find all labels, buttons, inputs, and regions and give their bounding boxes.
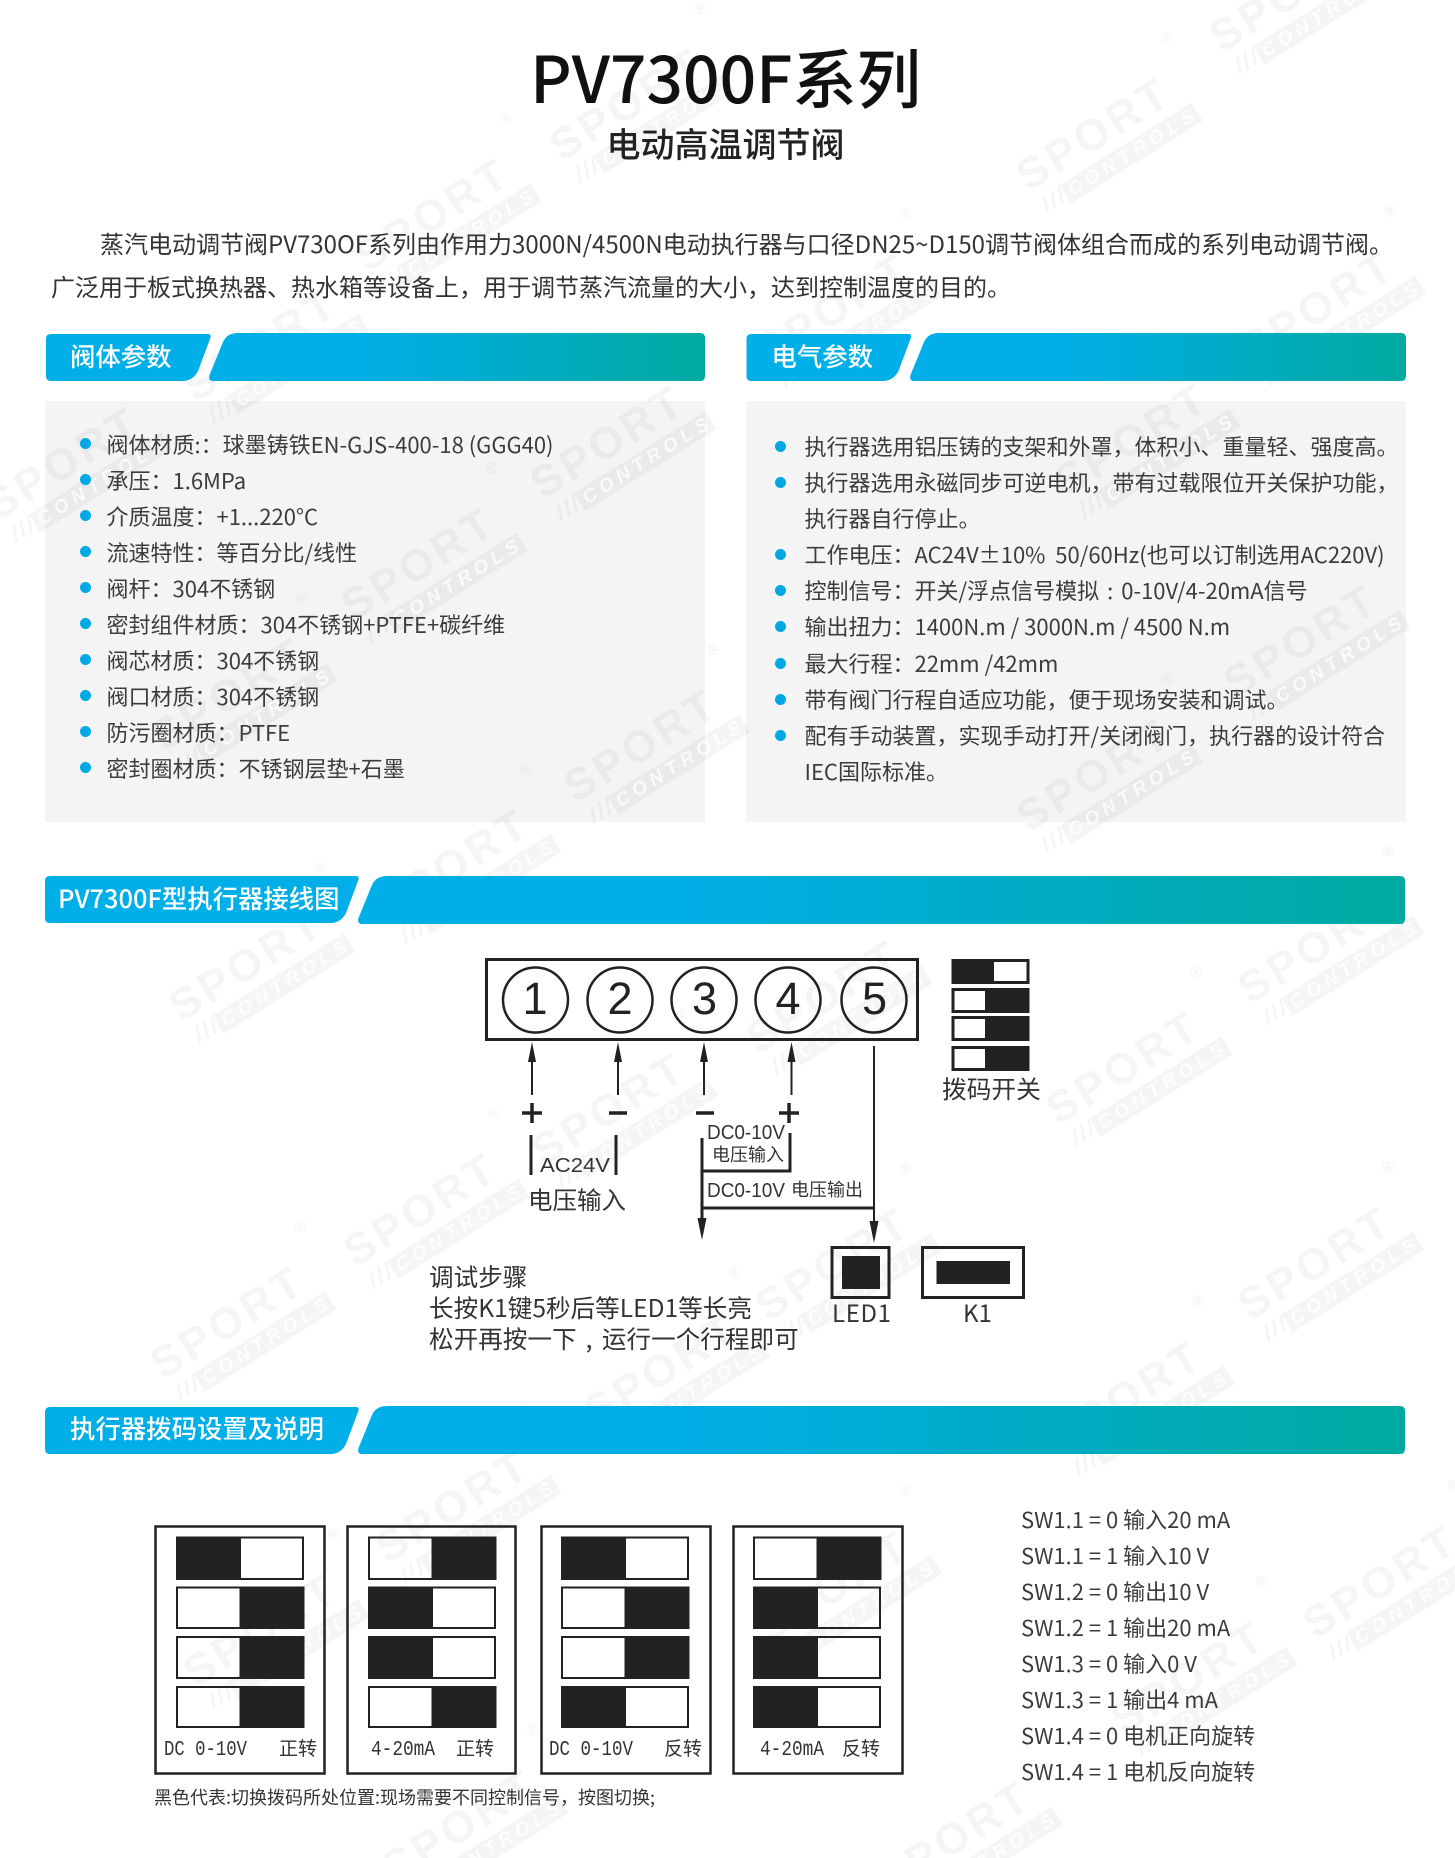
AC24V input bracket [528, 1135, 626, 1217]
list: SW settings: SW1.2 = 0 输出10 V [1021, 1575, 1209, 1607]
watermark layer: ® [1253, 1572, 1272, 1593]
DIP settings: DC 0-10V forward: DC 0-10V [164, 1739, 247, 1762]
list: body parameters: 介质温度：+1...220°C [106, 500, 318, 532]
section header: 拨码设置 [45, 1406, 1405, 1454]
watermark layer: ® [325, 239, 344, 260]
watermark layer: /// [765, 1044, 802, 1080]
terminal block: 3 [692, 973, 717, 1024]
watermark layer: /// [1130, 1726, 1167, 1761]
intro paragraph: 蒸汽电动调节阀PV730OF系列由作用力3000N/4500N电动执行器与口径DN25~D150调节阀体组合而成的系列电动调节阀。 [100, 225, 1393, 260]
watermark layer: CONTROLS [598, 76, 732, 171]
watermark layer: /// [569, 152, 605, 188]
watermark layer: CONTROLS [804, 1236, 938, 1331]
watermark layer: /// [169, 1370, 206, 1406]
watermark layer: ® [311, 859, 330, 879]
watermark layer: ® [725, 1264, 744, 1285]
watermark layer: ® [1379, 1157, 1398, 1178]
watermark layer: SPORT [347, 150, 515, 281]
watermark layer: ® [1382, 201, 1401, 222]
list: body parameters [80, 428, 554, 784]
watermark layer: CONTROLS [34, 435, 168, 530]
list: electrical parameters: 执行器选用铝压铸的支架和外罩，体积小、重量轻、强度高。 [804, 430, 1399, 462]
list: electrical parameters: 最大行程：22mm /42mm [804, 647, 1058, 679]
watermark layer: SPORT [1215, 577, 1384, 708]
intro paragraph [51, 225, 1393, 302]
debugging steps: 调试步骤 [429, 1258, 527, 1294]
watermark layer: SPORT [1229, 882, 1398, 1013]
watermark layer: /// [1257, 1311, 1294, 1347]
DIP settings: 4-20mA forward: 4-20mA [371, 1739, 435, 1762]
watermark layer: ® [524, 1720, 543, 1741]
watermark layer: SPORT [175, 281, 344, 411]
watermark layer: ® [1365, 535, 1384, 556]
watermark layer: SPORT [1008, 70, 1177, 201]
watermark layer: /// [394, 913, 431, 948]
watermark layer: /// [603, 1417, 640, 1453]
watermark layer: CONTROLS [232, 1602, 366, 1697]
AC24V input bracket: AC24V [540, 1155, 611, 1177]
list: body parameters: 阀芯材质：304不锈钢 [106, 644, 319, 676]
list: electrical parameters: 执行器选用永磁同步可逆电机，带有过载限位开关保护功能， [804, 466, 1399, 498]
list: SW settings: SW1.3 = 1 输出4 mA [1021, 1683, 1218, 1715]
watermark layer: ® [1196, 334, 1215, 355]
watermark layer: CONTROLS [1272, 613, 1406, 708]
watermark layer: /// [1259, 355, 1296, 390]
DC input bracket: 电压输入 [712, 1141, 784, 1167]
watermark layer: /// [775, 1634, 811, 1670]
watermark layer: SPORT [1040, 1333, 1209, 1464]
watermark layer: ® [672, 336, 691, 357]
watermark layer: CONTROLS [579, 414, 713, 509]
DIP settings: DC 0-10V forward: 正转 [279, 1734, 317, 1761]
list: electrical parameters: 工作电压：AC24V±10% 50/60Hz(也可以订制选用AC220V) [804, 538, 1385, 570]
list: SW settings: SW1.1 = 0 输入20 mA [1021, 1502, 1230, 1534]
watermark layer: ® [292, 1216, 311, 1237]
DC output line and arrows: 电压输出 [791, 1176, 863, 1202]
list: body parameters: 密封组件材质：304不锈钢+PTFE+碳纤维 [106, 608, 505, 640]
watermark layer: /// [171, 742, 207, 778]
watermark layer: SPORT [332, 500, 501, 631]
watermark layer: SPORT [541, 40, 710, 171]
list: body parameters: 阀口材质：304不锈钢 [106, 680, 319, 712]
DC output line and arrows [698, 1046, 878, 1243]
terminal block: 4 [775, 973, 801, 1024]
terminal block [486, 960, 918, 1040]
watermark layer: CONTROLS [424, 837, 558, 932]
section header: 电气参数 [746, 333, 1406, 381]
list: SW settings: SW1.1 = 1 输入10 V [1021, 1539, 1209, 1571]
watermark layer: ® [485, 1104, 504, 1125]
small DIP switch: 拨码开关 [942, 1070, 1041, 1106]
watermark layer: SPORT [1232, 243, 1401, 373]
watermark layer: CONTROLS [1102, 412, 1236, 506]
watermark layer: /// [362, 1257, 399, 1293]
watermark layer: SPORT [1008, 711, 1177, 842]
panel: body parameters background [45, 401, 705, 822]
intro paragraph: 广泛用于板式换热器、热水箱等设备上，用于调节蒸汽流量的大小，达到控制温度的目的。 [51, 268, 1011, 302]
list: electrical parameters: 控制信号：开关/浮点信号模拟 : 0-10V/4-20mA信号 [804, 574, 1308, 606]
watermark layer: SPORT [367, 801, 536, 932]
list: electrical parameters: 配有手动装置，实现手动打开/关闭阀门，执行器的设计符合 [804, 719, 1385, 751]
list: body parameters: 流速特性：等百分比/线性 [106, 536, 357, 568]
watermark layer: SPORT [1229, 1199, 1398, 1330]
DIP settings: 4-20mA forward: 正转 [456, 1734, 494, 1761]
list: SW settings: SW1.3 = 0 输入0 V [1021, 1647, 1197, 1679]
watermark layer: /// [5, 511, 41, 547]
watermark layer: SPORT [522, 378, 691, 509]
watermark layer: SPORT [747, 245, 916, 376]
watermark layer: SPORT [738, 932, 906, 1063]
watermark layer: ® [897, 203, 916, 224]
list: SW settings: SW1.4 = 0 电机正向旋转 [1021, 1719, 1255, 1751]
LED1 [832, 1248, 891, 1329]
list: body parameters: 阀体材质:：球墨铸铁EN-GJS-400-18 (GGG40) [106, 428, 554, 460]
watermark layer: ® [1158, 669, 1177, 690]
watermark layer: /// [583, 793, 619, 829]
list: body parameters: 密封圈材质：不锈钢层垫+石墨 [106, 752, 405, 784]
watermark layer: SPORT [523, 1045, 692, 1176]
watermark layer: ® [1018, 1732, 1037, 1753]
watermark layer: CONTROLS [1094, 1040, 1228, 1134]
watermark layer: ® [127, 357, 146, 378]
K1 [922, 1248, 1024, 1329]
panel: electrical parameters background [746, 401, 1406, 822]
watermark layer: ® [1187, 962, 1207, 983]
K1: K1 [963, 1294, 992, 1329]
watermark layer: /// [551, 1157, 587, 1193]
watermark layer: ® [897, 1158, 916, 1179]
watermark layer: CONTROLS [580, 1081, 714, 1176]
watermark layer: /// [1243, 689, 1279, 725]
watermark layer: SPORT [575, 1305, 744, 1436]
list: electrical parameters [775, 430, 1399, 787]
watermark layer: ® [517, 759, 536, 780]
watermark layer: ® [673, 1003, 692, 1024]
debugging steps [429, 1258, 799, 1356]
debugging steps: 长按K1键5秒后等LED1等长亮 [429, 1289, 752, 1325]
small DIP switch [942, 959, 1041, 1106]
watermark layer: CONTROLS [424, 1478, 558, 1573]
DC output line and arrows: DC0-10V [707, 1180, 786, 1202]
watermark layer: CONTROLS [200, 666, 334, 761]
watermark layer: ® [1190, 1291, 1209, 1312]
section header: 接线图: PV7300F型执行器接线图 [58, 880, 340, 916]
watermark layer: /// [1035, 182, 1072, 217]
watermark layer: CONTROLS [217, 937, 351, 1031]
watermark layer: ® [1158, 28, 1177, 49]
watermark layer: CONTROLS [198, 1294, 332, 1389]
watermark layer: /// [550, 490, 586, 525]
watermark layer: SPORT [367, 1442, 536, 1573]
section header: 阀体参数 [46, 333, 705, 381]
watermark layer: SPORT [175, 1566, 344, 1697]
list: SW settings: SW1.4 = 1 电机反向旋转 [1021, 1755, 1255, 1787]
list: electrical parameters: 带有阀门行程自适应功能，便于现场安装和调试。 [804, 683, 1289, 715]
watermark layer: CONTROLS [392, 1182, 526, 1276]
watermark layer: SPORT [555, 681, 724, 812]
watermark layer: /// [775, 1312, 811, 1348]
section header: 接线图 [45, 876, 1405, 924]
watermark layer: CONTROLS [804, 1559, 938, 1653]
watermark layer: SPORT [143, 630, 312, 761]
watermark layer: SPORT [1046, 375, 1215, 506]
terminal block: 1 [522, 973, 548, 1024]
watermark layer: /// [394, 1554, 431, 1589]
watermark layer: ® [497, 109, 516, 129]
watermark layer: /// [203, 393, 239, 428]
list: body parameters: 阀杆：304不锈钢 [106, 572, 275, 604]
watermark layer: ® [517, 1400, 536, 1421]
watermark layer: CONTROLS [794, 969, 928, 1063]
watermark layer: CONTROLS [804, 281, 938, 376]
terminal block: 5 [862, 973, 887, 1024]
watermark layer: CONTROLS [1065, 106, 1199, 201]
watermark layer: /// [360, 612, 397, 647]
DIP settings: 4-20mA reverse: 4-20mA [760, 1739, 824, 1762]
DIP settings: DC 0-10V forward [156, 1526, 324, 1774]
polarity signs [522, 1103, 799, 1123]
watermark layer: CONTROLS [632, 1342, 766, 1436]
section header: 拨码设置: 执行器拨码设置及说明 [70, 1410, 324, 1446]
watermark layer: CONTROLS [403, 187, 537, 281]
watermark layer: CONTROLS [1159, 1650, 1293, 1744]
watermark layer: CONTROLS [1065, 747, 1199, 842]
DIP settings: 4-20mA reverse [734, 1526, 902, 1774]
section header: 阀体参数: 阀体参数 [70, 338, 172, 374]
subtitle: 电动高温调节阀 [606, 118, 844, 167]
watermark layer: CONTROLS [1097, 1369, 1231, 1464]
watermark layer: CONTROLS [1286, 1235, 1420, 1330]
watermark layer: SPORT [335, 1146, 504, 1276]
DIP settings: DC 0-10V reverse [542, 1526, 710, 1774]
debugging steps: 松开再按一下 , 运行一个行程即可 [429, 1320, 799, 1356]
list: SW settings [1021, 1502, 1255, 1787]
list: body parameters: 防污圈材质：PTFE [106, 716, 290, 748]
DC input bracket: DC0-10V [707, 1122, 786, 1144]
DIP settings: 4-20mA reverse: 反转 [842, 1734, 880, 1761]
terminal block: 2 [607, 973, 633, 1024]
watermark layer: CONTROLS [389, 536, 523, 631]
LED1: LED1 [832, 1294, 891, 1329]
list: electrical parameters: 输出扭力：1400N.m / 3000N.m / 4500 N.m [804, 610, 1230, 642]
watermark layer: ® [897, 1481, 916, 1501]
watermark layer: ® [325, 1525, 344, 1545]
arrows: input terminals [528, 1042, 796, 1095]
watermark layer: /// [203, 1678, 239, 1714]
DIP settings: DC 0-10V reverse: DC 0-10V [549, 1739, 633, 1762]
watermark layer: ® [482, 458, 502, 479]
watermark layer: /// [1067, 1445, 1104, 1480]
title: PV7300F系列 [530, 30, 921, 122]
watermark layer: SPORT [1037, 1003, 1206, 1134]
watermark layer: ® [1379, 841, 1398, 862]
watermark layer: ® [705, 639, 724, 660]
watermark layer: /// [1229, 43, 1265, 79]
watermark layer: /// [1257, 994, 1294, 1030]
watermark layer: /// [188, 1012, 225, 1048]
caption: 黑色代表:切换拨码所处位置:现场需要不同控制信号，按图切换; [154, 1784, 655, 1810]
watermark layer: CONTROLS [1288, 279, 1423, 374]
section header: 电气参数: 电气参数 [772, 338, 873, 374]
AC24V input bracket: 电压输入 [528, 1182, 626, 1217]
list: SW settings: SW1.2 = 1 输出20 mA [1021, 1611, 1230, 1643]
watermark layer: SPORT [142, 1258, 310, 1389]
watermark layer: CONTROLS [612, 717, 746, 812]
watermark layer: SPORT [747, 1522, 916, 1653]
watermark layer: /// [775, 357, 811, 393]
watermark layer: ® [888, 891, 907, 911]
wiring diagram [429, 959, 1041, 1356]
watermark layer: /// [1322, 1630, 1359, 1665]
list: electrical parameters: 执行器自行停止。 [804, 502, 981, 534]
watermark layer: SPORT [1103, 1614, 1271, 1744]
watermark layer: SPORT [161, 900, 329, 1031]
watermark layer: CONTROLS [232, 317, 366, 411]
watermark layer: /// [1035, 823, 1072, 858]
watermark layer: CONTROLS [1286, 919, 1420, 1013]
DIP settings: 4-20mA forward [348, 1526, 516, 1774]
watermark layer: /// [1065, 1115, 1102, 1151]
list: body parameters: 承压：1.6MPa [106, 464, 246, 496]
DC input bracket [702, 1122, 790, 1226]
watermark layer: /// [1073, 487, 1110, 523]
DIP settings: DC 0-10V reverse: 反转 [664, 1734, 702, 1761]
watermark layer: SPORT [747, 1200, 916, 1331]
watermark layer: /// [374, 262, 411, 298]
watermark layer: ® [293, 589, 312, 609]
list: electrical parameters: IEC国际标准。 [804, 755, 948, 787]
